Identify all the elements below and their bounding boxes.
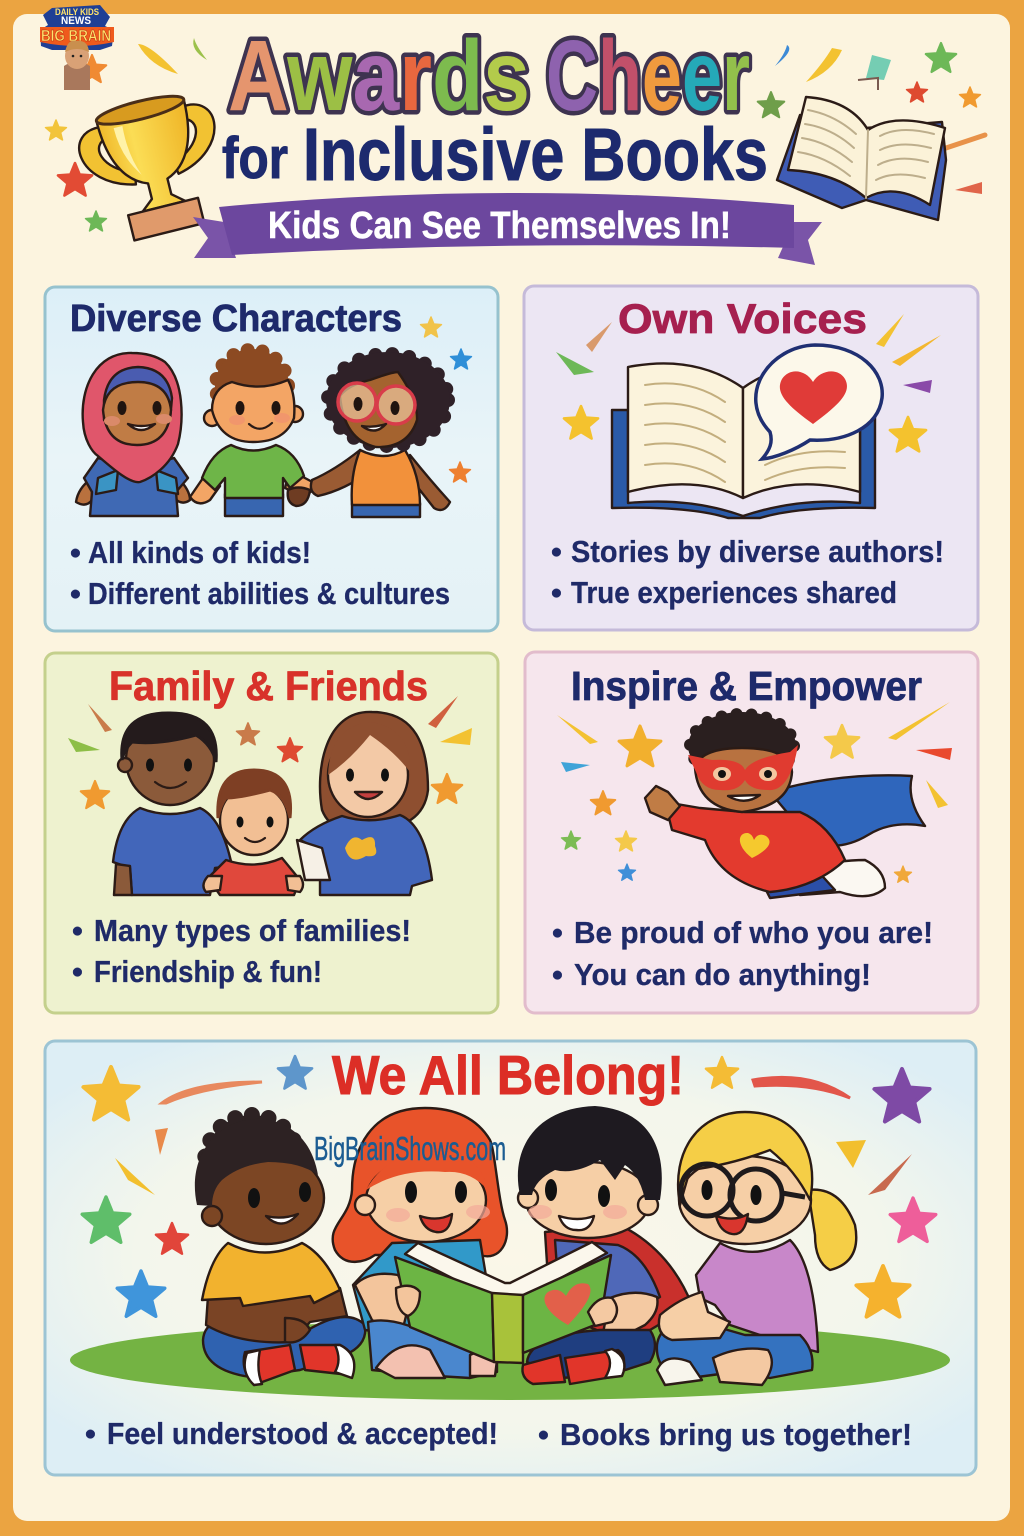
title: for <box>222 126 288 191</box>
bullet list: • <box>538 1417 549 1452</box>
title: Cheer <box>546 20 750 132</box>
bullet list <box>85 1416 912 1452</box>
bullet list: Friendship & fun! <box>94 954 322 989</box>
speech bubble with heart <box>756 345 882 459</box>
shared green book <box>395 1242 617 1363</box>
bullet list <box>551 534 944 610</box>
open book icon: header <box>777 97 985 220</box>
bullet list: • <box>551 575 562 610</box>
bullet list: Stories by diverse authors! <box>571 534 944 569</box>
kid: girl with glasses <box>288 352 450 517</box>
bullet list: All kinds of kids! <box>88 535 311 570</box>
subtitle ribbon: Kids Can See Themselves In! <box>268 205 731 247</box>
bullet list <box>552 915 933 992</box>
bullet list: • <box>552 957 563 992</box>
subtitle ribbon <box>193 193 822 265</box>
kid: girl in hijab <box>76 353 190 516</box>
bullet list: • <box>72 954 83 989</box>
bullet list: • <box>70 535 81 570</box>
logo: Daily Kids News with Big Brain: NEWS <box>61 15 91 27</box>
panel: Family & Friends <box>45 653 498 1013</box>
confetti stars and swooshes <box>82 1056 936 1317</box>
kid: boy in yellow shirt <box>195 1115 365 1385</box>
logo: Daily Kids News with Big Brain: DAILY KIDS <box>55 7 99 17</box>
bullet list: True experiences shared <box>571 575 897 610</box>
stars <box>421 317 471 482</box>
kid: boy with black hair <box>518 1106 692 1384</box>
title: Awards <box>228 20 530 132</box>
bullet list: • <box>552 915 563 950</box>
confetti rays and stars <box>68 696 472 808</box>
confetti rays and stars <box>557 702 952 882</box>
bullet list: • <box>551 534 562 569</box>
heading: We All Belong! <box>332 1044 684 1106</box>
bullet list: Many types of families! <box>94 913 411 948</box>
title <box>222 20 768 196</box>
flying superhero kid <box>645 712 925 898</box>
panel: Own Voices <box>524 286 978 630</box>
bullet list <box>72 913 411 989</box>
title: Inclusive Books <box>303 113 768 196</box>
bullet list: Books bring us together! <box>560 1417 912 1452</box>
watermark: BigBrainShows.com <box>314 1130 506 1167</box>
heading: Inspire & Empower <box>571 663 922 709</box>
bullet list: Be proud of who you are! <box>574 915 933 950</box>
trophy icon <box>71 85 237 248</box>
logo: Daily Kids News with Big Brain: BIG BRAIN <box>41 28 111 45</box>
bullet list: • <box>70 576 81 611</box>
family: boy, toddler, girl <box>113 712 432 895</box>
hands holding the book <box>396 1286 617 1326</box>
bullet list: • <box>85 1416 96 1451</box>
panel: We All Belong <box>45 1041 976 1475</box>
open book with heart speech bubble <box>612 345 882 518</box>
boy <box>113 713 232 895</box>
heading: Diverse Characters <box>70 298 402 340</box>
bullet list: • <box>72 913 83 948</box>
bullet list: Feel understood & accepted! <box>107 1416 498 1451</box>
kid: blonde girl with glasses <box>657 1112 856 1385</box>
panel: Diverse Characters <box>45 287 498 631</box>
logo: Daily Kids News with Big Brain <box>40 5 114 90</box>
panel: Inspire & Empower <box>525 652 978 1013</box>
confetti rays and stars <box>556 314 941 451</box>
kid: boy in green shirt <box>190 349 318 516</box>
heading: Own Voices <box>618 295 867 342</box>
kid: red-haired girl <box>333 1108 507 1378</box>
grass <box>70 1320 950 1400</box>
bullet list <box>70 535 450 611</box>
bullet list: You can do anything! <box>574 957 871 992</box>
bullet list: Different abilities & cultures <box>88 576 450 611</box>
toddler <box>203 770 330 895</box>
heading: Family & Friends <box>109 663 428 709</box>
confetti: header <box>46 38 982 231</box>
girl <box>300 712 432 895</box>
